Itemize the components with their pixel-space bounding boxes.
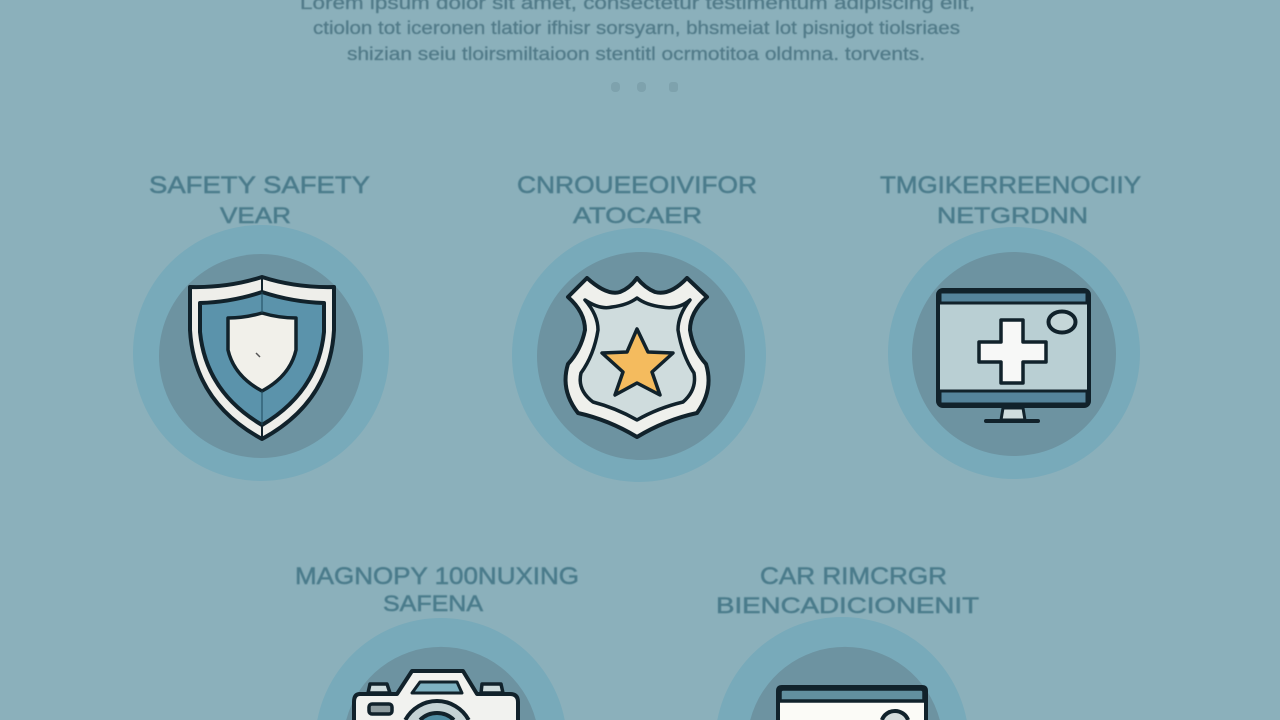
panel: safety shield [133, 172, 389, 481]
heading: monitor [880, 172, 1141, 228]
intro text block: shizian seiu tloirsmiltaioon stentitl ocrmotitoa oldmna. torvents. [347, 44, 925, 64]
heading: badge [517, 172, 757, 228]
panel: police badge [512, 172, 766, 482]
intro text block: ctiolon tot iceronen tlatior ifhisr sorsyarn, bhsmeiat lot pisnigot tiolsriaes [313, 18, 960, 38]
heading: car reminder: BIENCADICIONENIT [716, 593, 979, 618]
icon: monitor with cross [888, 227, 1140, 479]
icon: browser window [717, 617, 967, 720]
panel: medical monitor [880, 172, 1141, 479]
heading: safety: VEAR [220, 203, 291, 228]
intro text block [300, 0, 975, 64]
heading: camera: SAFENA [383, 591, 483, 616]
icon: shield [133, 225, 389, 481]
heading: car reminder [716, 563, 979, 618]
heading: car reminder: CAR RIMCRGR [760, 563, 947, 590]
pagination dots [611, 82, 678, 92]
heading: safety: SAFETY SAFETY [149, 172, 370, 199]
panel: camera [295, 563, 579, 720]
heading: badge: ATOCAER [573, 203, 702, 228]
panel: car reminder [716, 563, 979, 720]
heading: safety [149, 172, 370, 228]
heading: camera [295, 563, 579, 616]
heading: monitor: TMGIKERREENOCIIY [880, 172, 1141, 199]
heading: camera: MAGNOPY 100NUXING [295, 563, 579, 590]
icon: badge with star [512, 228, 766, 482]
heading: monitor: NETGRDNN [937, 203, 1088, 228]
heading: badge: CNROUEEOIVIFOR [517, 172, 757, 199]
icon: camera [317, 618, 565, 720]
